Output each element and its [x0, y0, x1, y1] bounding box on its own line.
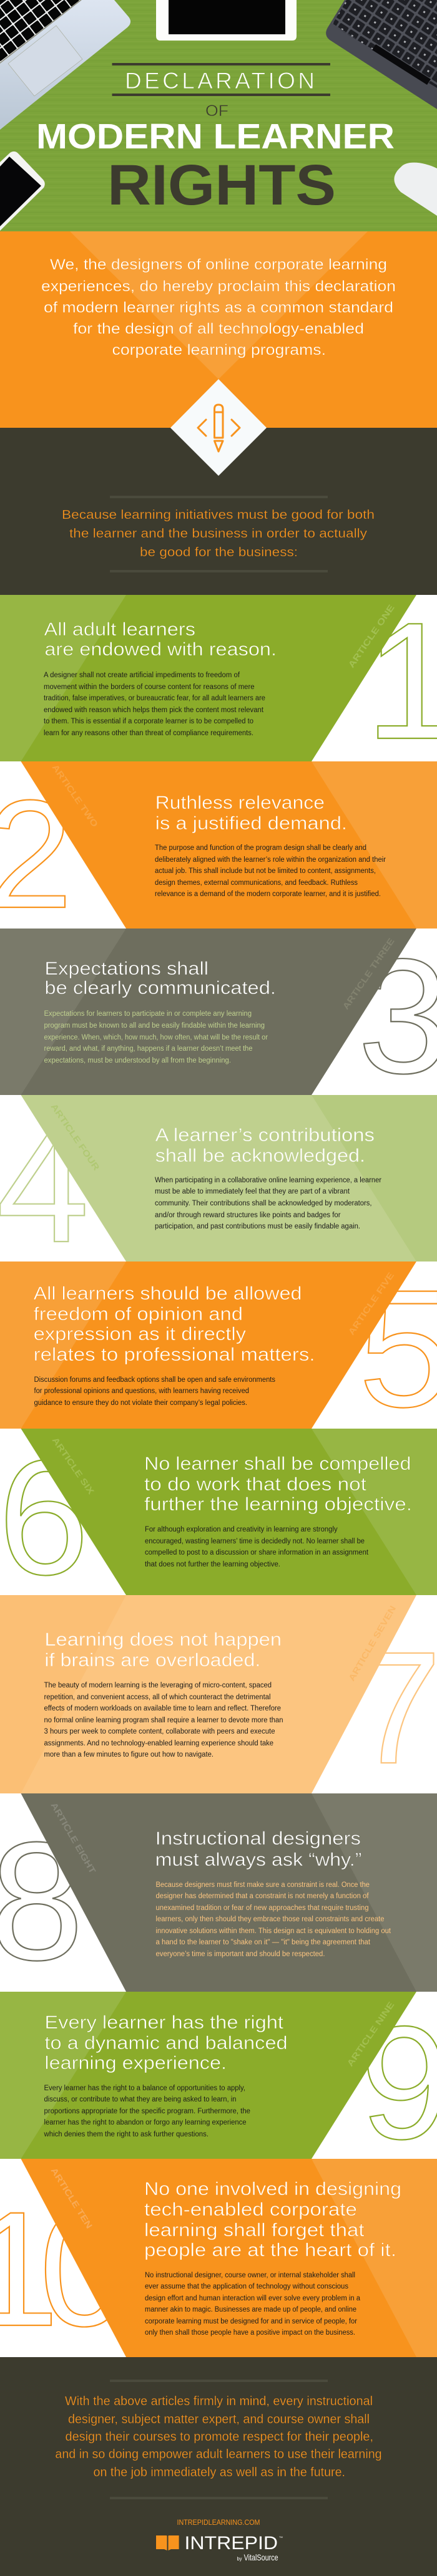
- heading: must always ask “why.”: [155, 1850, 361, 1870]
- article 5: [0, 1255, 437, 1442]
- article 1: [0, 587, 437, 774]
- label: article nine: ARTICLE NINE: [345, 2000, 396, 2068]
- label: article five: ARTICLE FIVE: [346, 1270, 396, 1337]
- body text: learner has the right to abandon or forgo any learning experience: [44, 2119, 246, 2126]
- body text: design themes, external communications, and feedback. Ruthless: [155, 879, 358, 887]
- body text: that does not further the learning objective.: [145, 1561, 280, 1568]
- icon: keyboard: [326, 0, 437, 109]
- preamble text: the learner and the business in order to actually: [69, 527, 367, 541]
- title line: rights: RIGHTS: [107, 153, 336, 217]
- body text: deliberately aligned with the learner’s role within the organization and their: [155, 856, 386, 864]
- label: article four: ARTICLE FOUR: [49, 1102, 102, 1172]
- body text: unexamined tradition or fear of new approaches that require trusting: [156, 1904, 368, 1912]
- preamble text: be good for the business:: [140, 546, 298, 559]
- icon: open book: [156, 2535, 179, 2550]
- intro text: [41, 256, 396, 359]
- body text: The purpose and function of the program design shall be clearly and: [155, 844, 366, 852]
- logo: Intrepid by VitalSource: INTREPID: [185, 2533, 278, 2554]
- closing text: With the above articles firmly in mind, every instructional: [65, 2395, 373, 2408]
- label: article two: ARTICLE TWO: [51, 763, 100, 829]
- heading: [34, 1283, 315, 1365]
- heading: freedom of opinion and: [34, 1304, 243, 1324]
- heading: tech-enabled corporate: [144, 2199, 357, 2220]
- body text: effects of modern workloads on available time to learn and reflect. Therefore: [44, 1705, 281, 1712]
- body text: tradition, false imperatives, or bureaucratic fear, for all adult learners are: [44, 695, 265, 702]
- heading: Learning does not happen: [44, 1629, 282, 1650]
- heading: [155, 1828, 361, 1870]
- body text: no formal online learning program shall require a learner to devote more than: [44, 1717, 283, 1724]
- preamble text: [62, 508, 375, 559]
- closing text: [55, 2395, 382, 2479]
- number 6: 6: [0, 1426, 89, 1609]
- body text: expectations, must be understood by all from the beginning.: [44, 1057, 231, 1064]
- body text: guidance to ensure they do not violate their company’s legal policies.: [34, 1399, 247, 1407]
- body text: a hand to the learner to "shake on it" — "it" being the agreement that: [156, 1939, 371, 1946]
- body text: experience. When, which, how much, how often, what will be the result or: [44, 1034, 268, 1041]
- heading: A learner’s contributions: [155, 1125, 375, 1146]
- heading: Every learner has the right: [44, 2012, 284, 2033]
- title: [36, 63, 395, 217]
- heading: All learners should be allowed: [34, 1283, 302, 1304]
- body text: innovative solutions within them. This design act is equivalent to holding out: [156, 1927, 391, 1935]
- article 8: [0, 1793, 437, 1995]
- label: article six: ARTICLE SIX: [51, 1435, 97, 1497]
- body text: [155, 844, 386, 898]
- body text: corporate learning must be designed for and in service of people, for: [145, 2318, 357, 2325]
- logo: Intrepid by VitalSource: VitalSource: [244, 2552, 278, 2562]
- title line: declaration: DECLARATION: [125, 68, 315, 94]
- heading: to a dynamic and balanced: [44, 2033, 288, 2053]
- heading: relates to professional matters.: [34, 1344, 315, 1365]
- label: article eight: ARTICLE EIGHT: [49, 1801, 98, 1876]
- body text: more than a few minutes to figure out how to navigate.: [44, 1751, 214, 1758]
- heading: [44, 958, 276, 998]
- body text: Because designers must first make sure a constraint is real. Once the: [156, 1881, 370, 1889]
- heading: [144, 2179, 401, 2260]
- article 3: [0, 925, 437, 1107]
- body text: [44, 1682, 283, 1758]
- body text: The beauty of modern learning is the leveraging of micro-content, spaced: [44, 1682, 272, 1689]
- body text: manner akin to magic. Businesses are made up of people, and online: [145, 2306, 356, 2313]
- heading: learning shall forget that: [144, 2220, 365, 2241]
- preamble text: Because learning initiatives must be good for both: [62, 508, 375, 522]
- heading: Expectations shall: [44, 958, 209, 979]
- intro text: We, the designers of online corporate learning: [50, 256, 387, 273]
- heading: [155, 1125, 375, 1166]
- body text: ever assume that the application of technology without conscious: [145, 2283, 348, 2290]
- icon: diamond with pencil: [170, 379, 267, 476]
- closing text: and in so doing empower adult learners to use their learning: [55, 2448, 382, 2461]
- body text: [44, 2085, 250, 2138]
- heading: to do work that does not: [144, 1474, 367, 1495]
- intro text: corporate learning programs.: [112, 342, 326, 359]
- body text: compelled to post to a discussion or share information in an assignment: [145, 1549, 369, 1556]
- panel: closing statement: [0, 2357, 437, 2576]
- body text: proportions appropriate for the specific program. Furthermore, the: [44, 2108, 250, 2115]
- heading: further the learning objective.: [144, 1494, 412, 1515]
- article 2: [0, 761, 437, 940]
- heading: learning experience.: [44, 2053, 227, 2073]
- body text: everyone’s time is important and should be respected.: [156, 1951, 325, 1958]
- body text: encouraged, wasting learners’ time is decidedly not. No learner shall be: [145, 1538, 365, 1545]
- closing text: designer, subject matter expert, and course owner shall: [68, 2413, 370, 2426]
- closing text: design their courses to promote respect for their people,: [65, 2430, 373, 2444]
- heading: are endowed with reason.: [44, 639, 277, 660]
- body text: Every learner has the right to a balance of opportunities to apply,: [44, 2085, 245, 2092]
- body text: designer has determined that a constraint is not merely a function of: [156, 1893, 369, 1900]
- body text: When participating in a collaborative online learning experience, a learner: [155, 1177, 381, 1184]
- body text: and/or through reward structures like points and badges for: [155, 1212, 341, 1219]
- heading: [44, 2012, 288, 2073]
- heading: be clearly communicated.: [44, 978, 276, 998]
- body text: [145, 2272, 361, 2337]
- body text: [156, 1881, 391, 1958]
- heading: [155, 793, 347, 834]
- heading: No learner shall be compelled: [144, 1454, 411, 1474]
- body text: endowed with reason which helps them pick the content most relevant: [44, 707, 264, 714]
- heading: expression as it directly: [34, 1324, 246, 1344]
- heading: [144, 1454, 412, 1515]
- article 9: [0, 1992, 437, 2173]
- body text: must be able to immediately feel that they are part of a vibrant: [155, 1188, 350, 1195]
- icon: tablet: [156, 0, 297, 41]
- body text: learners, only then should they embrace those real constraints and create: [156, 1916, 385, 1923]
- logo: Intrepid by VitalSource: by: [237, 2556, 242, 2562]
- body text: which denies them the right to ask further questions.: [44, 2131, 209, 2138]
- intro text: of modern learner rights as a common standard: [44, 299, 393, 316]
- intro text: for the design of all technology-enabled: [73, 321, 364, 337]
- body text: A designer shall not create artificial impediments to freedom of: [44, 672, 240, 679]
- body text: [145, 1526, 369, 1568]
- heading: if brains are overloaded.: [44, 1650, 260, 1671]
- body text: to them. This is essential if a corporate learner is to be compelled to: [44, 718, 253, 725]
- body text: [44, 1010, 268, 1064]
- hero: desk photo background: [0, 0, 437, 231]
- body text: reward, and what, if anything, happens if a learner doesn’t meet the: [44, 1045, 252, 1053]
- body text: Expectations for learners to participate in or complete any learning: [44, 1010, 252, 1018]
- panel: intro declaration: [0, 231, 437, 428]
- body text: participation, and past contributions must be easily findable again.: [155, 1223, 360, 1230]
- body text: [34, 1376, 275, 1407]
- body text: program must be known to all and be easily findable within the learning: [44, 1022, 265, 1030]
- title line: of: OF: [205, 102, 228, 120]
- body text: for professional opinions and questions, with learners having received: [34, 1387, 249, 1395]
- label: article one: ARTICLE ONE: [346, 602, 396, 670]
- closing text: on the job immediately as well as in the future.: [94, 2466, 345, 2479]
- body text: design effort and human interaction will ever solve every problem in a: [145, 2295, 361, 2302]
- body text: only then shall those people have a positive impact on the business.: [145, 2329, 355, 2337]
- body text: [44, 672, 265, 737]
- body text: movement within the borders of course content for reasons of mere: [44, 683, 255, 691]
- article 6: [0, 1426, 437, 1609]
- body text: discuss, or contribute to what they are being asked to learn, in: [44, 2096, 236, 2103]
- heading: is a justified demand.: [155, 813, 347, 834]
- logo: Intrepid by VitalSource: [156, 2533, 283, 2562]
- heading: No one involved in designing: [144, 2179, 401, 2199]
- body text: repetition, and convenient access, all of which counteract the detrimental: [44, 1694, 271, 1701]
- label: article ten: ARTICLE TEN: [49, 2166, 94, 2231]
- body text: learn for any reasons other than threat of compliance requirements.: [44, 730, 253, 737]
- heading: shall be acknowledged.: [155, 1146, 365, 1166]
- body text: No instructional designer, course owner, or internal stakeholder shall: [145, 2272, 355, 2279]
- title line: modern learner: MODERN LEARNER: [36, 117, 395, 157]
- body text: 3 hours per week to complete content, collaborate with peers and execute: [44, 1728, 275, 1735]
- body text: community. Their contributions shall be acknowledged by moderators,: [155, 1200, 372, 1207]
- body text: assignments. And no technology-enabled learning experience should take: [44, 1740, 273, 1747]
- body text: For although exploration and creativity in learning are strongly: [145, 1526, 338, 1533]
- heading: [44, 1629, 282, 1671]
- heading: people are at the heart of it.: [144, 2240, 396, 2260]
- website link text: INTREPIDLEARNING.COM: [177, 2519, 260, 2527]
- heading: Ruthless relevance: [155, 793, 325, 813]
- heading: Instructional designers: [155, 1828, 361, 1849]
- article 4: [0, 1090, 437, 1277]
- heading: [44, 619, 277, 660]
- heading: All adult learners: [44, 619, 195, 640]
- article 7: [0, 1595, 437, 1797]
- body text: Discussion forums and feedback options shall be open and safe environments: [34, 1376, 275, 1384]
- body text: [155, 1177, 381, 1230]
- body text: actual job. This shall include but not be limited to content, assignments,: [155, 867, 376, 875]
- body text: relevance is a demand of the modern corporate learner, and it is justified.: [155, 890, 381, 898]
- icon: computer mouse: [394, 163, 437, 216]
- intro text: experiences, do hereby proclaim this declaration: [41, 278, 396, 295]
- icon: laptop: [0, 0, 130, 130]
- label: article three: ARTICLE THREE: [340, 936, 396, 1011]
- icon: smartphone: [0, 152, 45, 231]
- logo: Intrepid by VitalSource: TM: [279, 2535, 283, 2539]
- label: article seven: ARTICLE SEVEN: [346, 1604, 398, 1682]
- panel: preamble: [0, 428, 437, 595]
- article 10: [0, 2159, 437, 2360]
